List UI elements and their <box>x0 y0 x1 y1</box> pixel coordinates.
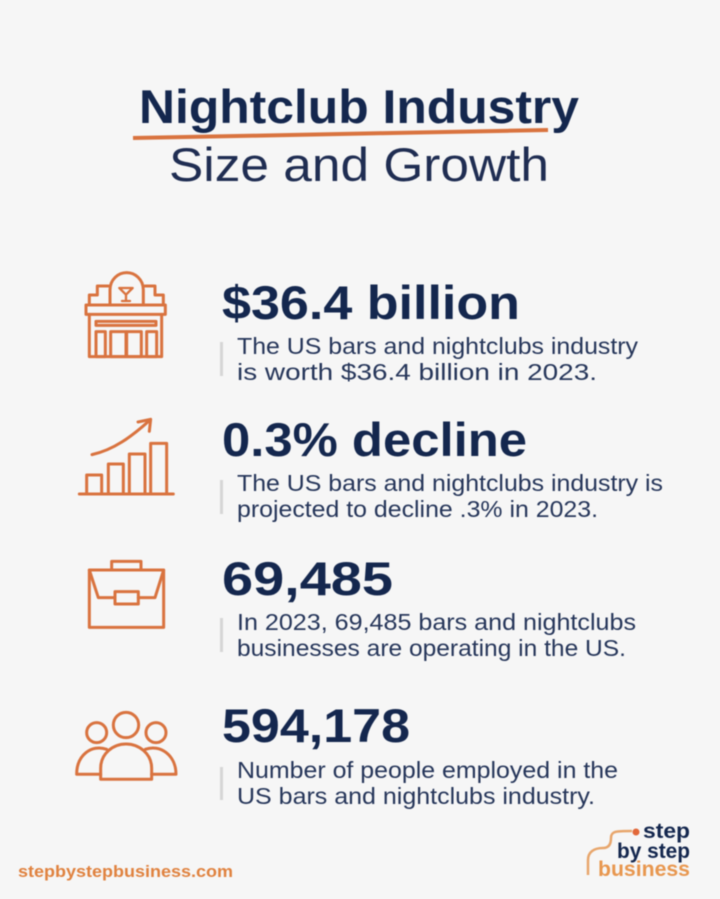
title: Nightclub Industry <box>139 80 579 133</box>
divider <box>220 480 223 514</box>
title <box>133 80 579 191</box>
divider <box>220 767 223 800</box>
stat: businesses <box>89 552 636 661</box>
logo dot <box>632 828 640 836</box>
footer website: stepbystepbusiness.com <box>18 862 233 881</box>
description: Number of people employed in the <box>237 757 618 783</box>
description: US bars and nightclubs industry. <box>237 783 595 809</box>
stat: employment <box>77 699 618 809</box>
icon: group of people <box>77 712 176 779</box>
stat: decline <box>79 413 663 522</box>
logo: step by step business: by step <box>617 840 690 863</box>
stat value: 0.3% decline <box>222 413 527 466</box>
stat: market size <box>86 273 639 385</box>
description: The US bars and nightclubs industry is <box>237 470 663 496</box>
divider <box>220 618 223 652</box>
stat value: 594,178 <box>222 699 410 752</box>
icon: nightclub building <box>86 273 165 357</box>
logo: step by step business: step <box>643 820 690 843</box>
title underline <box>133 130 548 138</box>
logo arc <box>588 831 632 875</box>
description: projected to decline .3% in 2023. <box>237 496 598 522</box>
icon: briefcase <box>89 561 164 627</box>
description: businesses are operating in the US. <box>237 635 626 661</box>
logo: step by step business: business <box>598 858 690 881</box>
stat value: 69,485 <box>222 552 393 605</box>
divider <box>220 342 223 376</box>
stat value: $36.4 billion <box>222 276 520 329</box>
description: is worth $36.4 billion in 2023. <box>237 359 597 385</box>
icon: growth chart <box>79 419 173 494</box>
logo: step by step business <box>588 820 690 881</box>
description: The US bars and nightclubs industry <box>237 333 639 359</box>
title: Size and Growth <box>169 138 549 191</box>
description: In 2023, 69,485 bars and nightclubs <box>237 609 636 635</box>
